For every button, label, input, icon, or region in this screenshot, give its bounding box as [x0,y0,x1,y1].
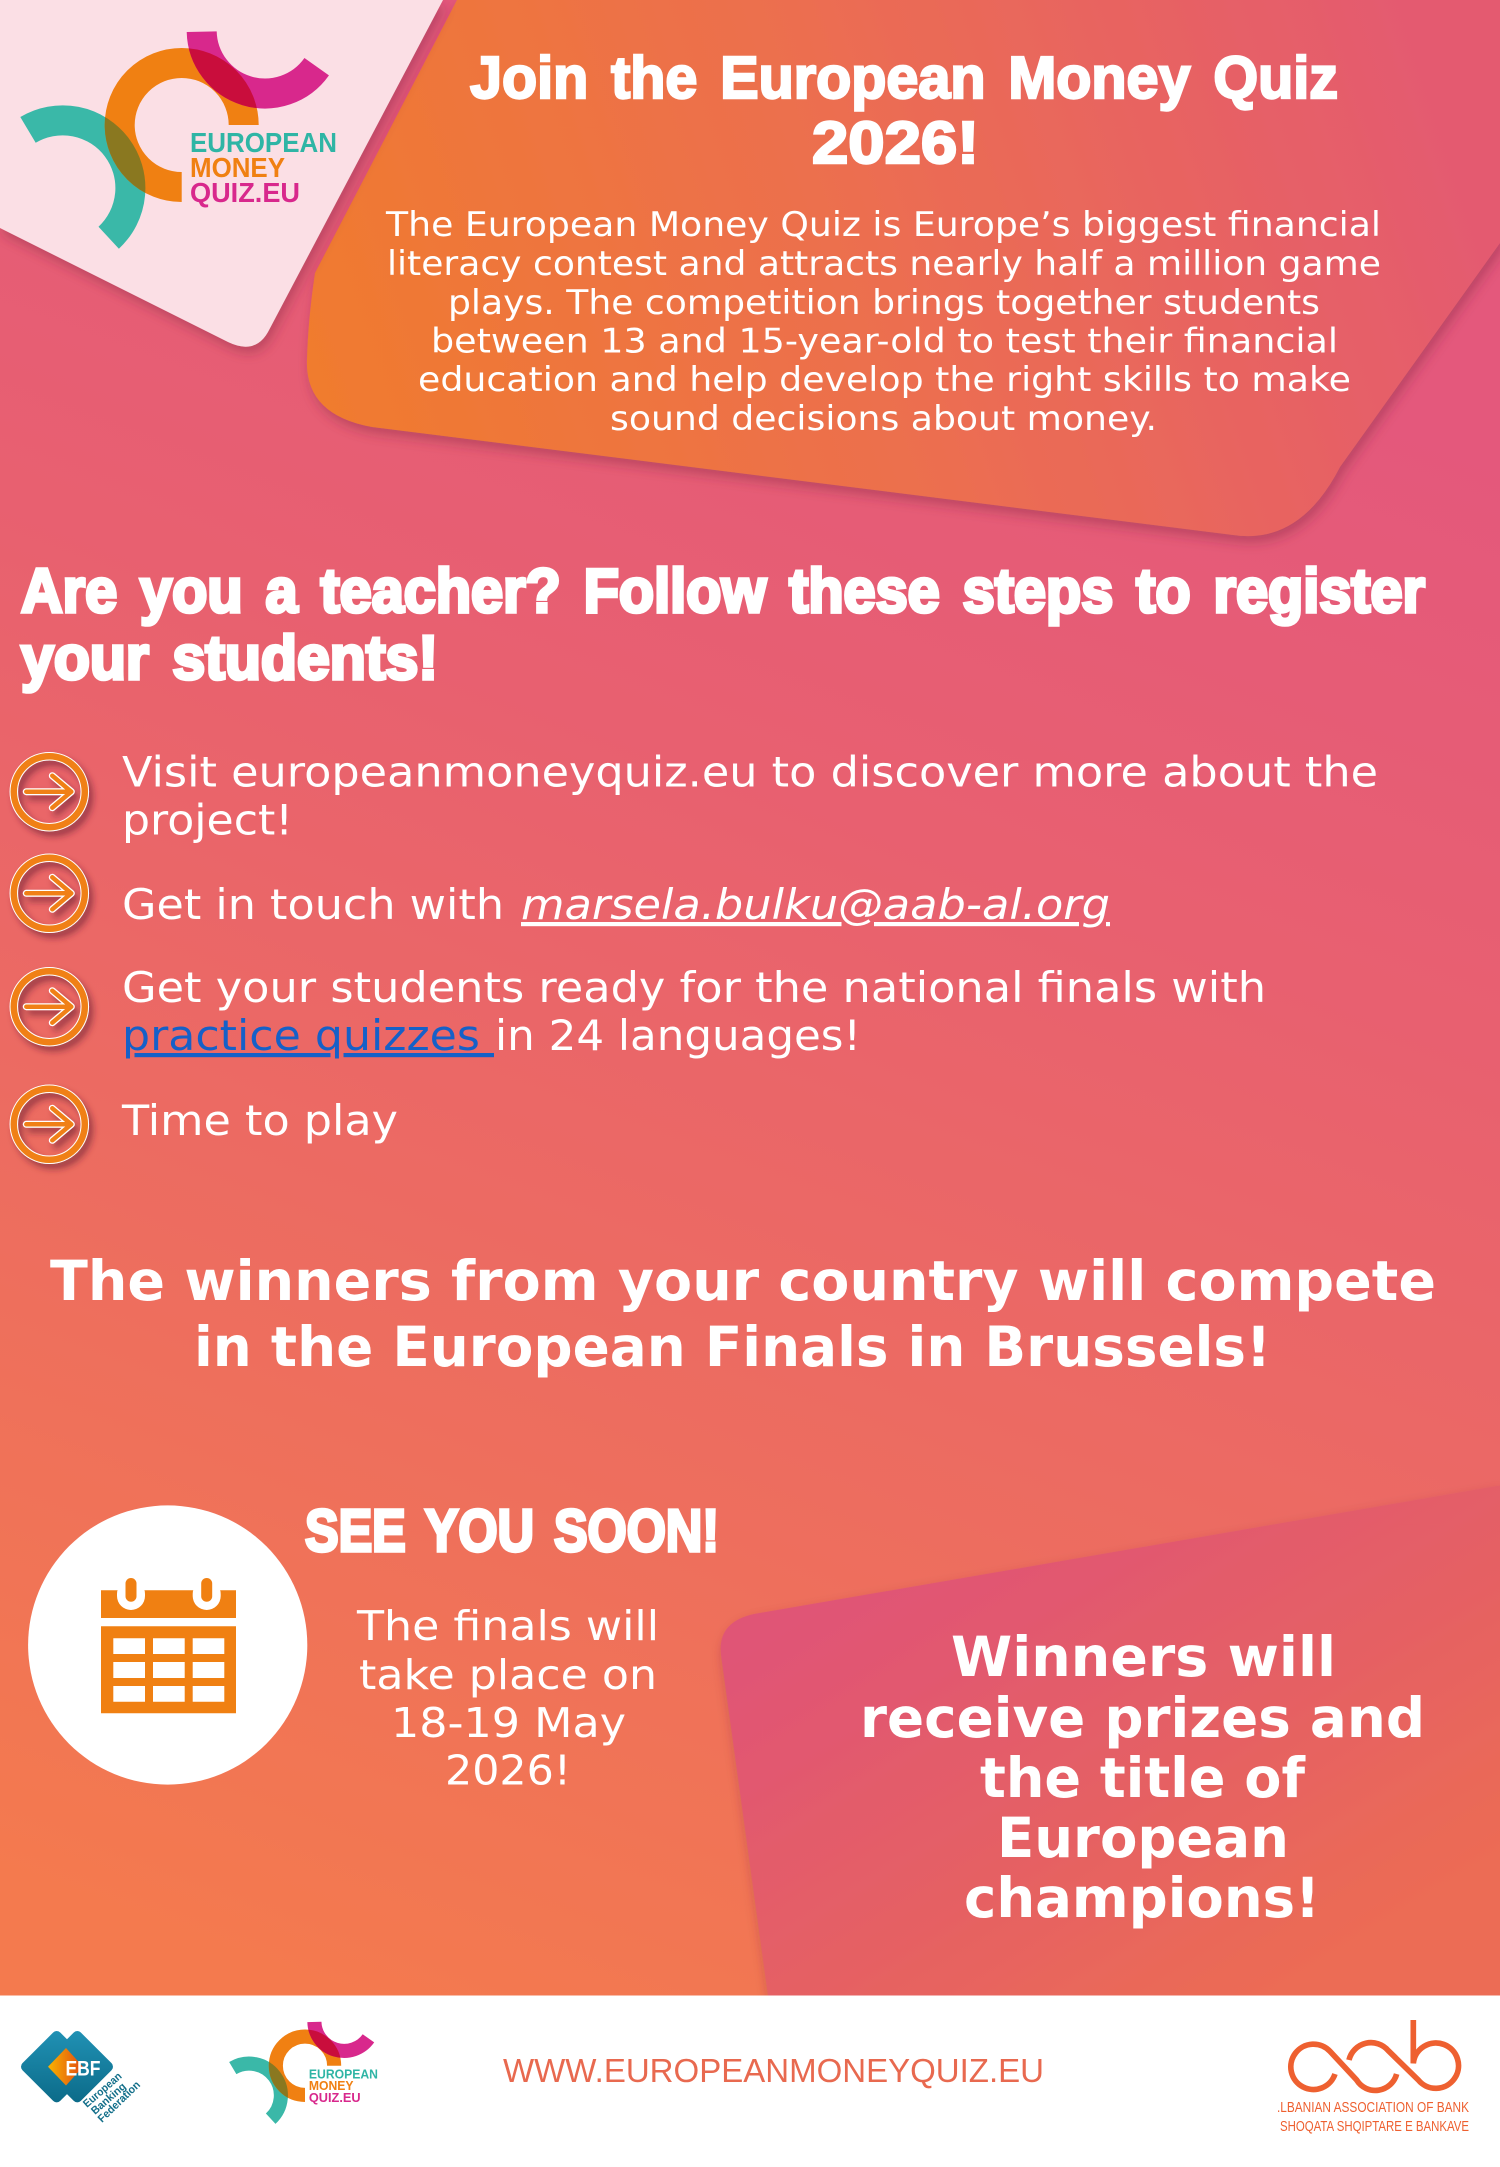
logo: EBF [19,2029,143,2125]
heading: European finals: The winners from your country will compete [50,1249,1436,1313]
step 1 text: project! [122,796,293,844]
panel: prizes [721,1486,1500,1996]
step 4 text: Time to play [121,1096,398,1145]
logo: European Money Quiz small [233,2022,378,2119]
logo: EBF: EBF [66,2058,101,2081]
intro text: education and help develop the right skills to make [418,360,1351,399]
intro text: literacy contest and attracts nearly half a million game [387,244,1381,283]
steps list [14,748,1378,1160]
panel: logo card [0,0,443,347]
logo: European Money Quiz: EUROPEAN [190,127,337,158]
icon: step 1 arrow [14,756,85,827]
logo: EBF: European [81,2070,125,2110]
panel: footer [0,1996,1500,2167]
website url: WWW.EUROPEANMONEYQUIZ.EU [503,2052,1044,2089]
step 1 text [122,748,1378,844]
intro text: The European Money Quiz is Europe’s biggest financial [385,205,1381,244]
logo: European Money Quiz [28,32,337,238]
step 2 text: marsela.bulku@aab-al.org [521,880,1110,929]
prize text [860,1625,1425,1930]
footer background [0,1996,1500,2167]
finals date text: 18-19 May [391,1699,626,1747]
logo: European Money Quiz small: QUIZ.EU [309,2090,361,2105]
logo: Albanian Association of Banks [1277,2020,1469,2135]
logo: European Money Quiz: QUIZ.EU [190,177,300,208]
heading: European finals [50,1249,1436,1379]
step 3 text [122,963,1266,1060]
intro text: between 13 and 15-year-old to test their financial [431,322,1338,360]
heading: teacher steps: your students! [21,624,438,693]
finals date text: The finals will [356,1602,659,1650]
logo: EBF: Banking [89,2081,129,2117]
finals date text: take place on [359,1651,657,1699]
step 2 text [122,880,1110,929]
finals date text: 2026! [445,1746,571,1794]
prize text: the title of [980,1746,1306,1810]
icon: calendar [28,1505,307,1785]
step 3 text: Get your students ready for the national finals with [122,963,1266,1012]
intro text: plays. The competition brings together students [448,283,1320,322]
panel: intro [307,0,1500,536]
heading: teacher steps [21,557,1425,693]
prize text: receive prizes and [860,1686,1425,1750]
heading: teacher steps: Are you a teacher? Follow these steps to register [21,557,1425,626]
icon: step 2 arrow [14,858,85,929]
logo: European Money Quiz small: EUROPEAN [309,2066,378,2081]
logo: EBF: Federation [96,2079,143,2125]
heading: European finals: in the European Finals in Brussels! [194,1315,1271,1379]
heading: see you soon: SEE YOU SOON! [305,1498,719,1564]
logo card shape [0,0,443,347]
finals date text [356,1602,659,1794]
intro text: sound decisions about money. [610,399,1157,438]
prize text: champions! [964,1866,1320,1930]
step 3 text: practice quizzes [122,1011,494,1060]
step 3 text: in 24 languages! [495,1011,861,1060]
prize text: Winners will [951,1625,1336,1689]
prize panel shape [721,1486,1500,1996]
logo: European Money Quiz: MONEY [190,152,285,183]
step 2 text: Get in touch with [122,880,504,929]
icon: step 3 arrow [14,971,85,1042]
title: Join the European Money Quiz [470,45,1338,111]
intro text [385,205,1381,438]
icon: step 4 arrow [14,1089,85,1160]
title [470,45,1338,176]
title: 2026! [812,110,979,176]
logo: European Money Quiz small: MONEY [309,2078,354,2093]
step 1 text: Visit europeanmoneyquiz.eu to discover more about the [122,748,1378,796]
prize text: European [997,1806,1289,1870]
intro panel shape [307,0,1500,536]
